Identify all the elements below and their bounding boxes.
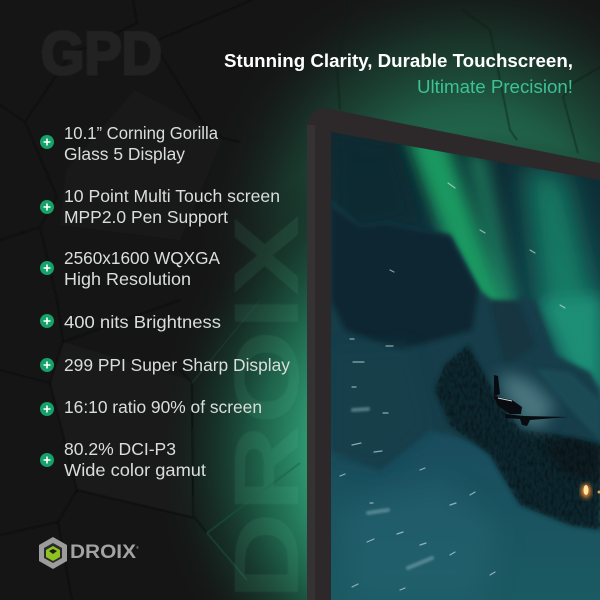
DROIX logo [39, 537, 139, 569]
feature: Multi touch [40, 186, 280, 227]
snow [340, 183, 565, 590]
feature: Gorilla Glass [40, 123, 218, 164]
feature: Multi touch: 10 Point Multi Touch screen [64, 186, 280, 206]
DROIX logo: ® [136, 545, 139, 550]
aurora [363, 144, 600, 399]
mountain [331, 200, 600, 600]
watermark: vertical DROIX logo: DROIX [216, 215, 318, 600]
watermark: GPD logo: GPD [41, 20, 162, 87]
feature: ratio: 16:10 ratio 90% of screen [64, 397, 262, 417]
subtitle: Ultimate Precision! [417, 76, 573, 97]
feature: Gorilla Glass: 10.1” Corning Gorilla [64, 123, 218, 143]
DROIX logo: DROIX [70, 542, 136, 563]
mountain rock texture [435, 345, 600, 530]
feature: resolution: 2560x1600 WQXGA [64, 248, 220, 268]
fire [581, 484, 600, 498]
feature list [40, 123, 290, 480]
feature: resolution: High Resolution [64, 269, 191, 289]
title [224, 51, 573, 97]
feature: colour gamut: Wide color gamut [64, 460, 206, 480]
feature: Gorilla Glass: Glass 5 Display [64, 144, 185, 164]
wide blurred snow streaks [353, 409, 432, 568]
laptop [307, 108, 600, 600]
feature: brightness: 400 nits Brightness [64, 312, 221, 332]
plane [493, 375, 568, 426]
feature: colour gamut [40, 439, 206, 480]
icon: hexagon cube [39, 537, 67, 569]
laptop screen image [331, 130, 600, 600]
feature: Multi touch: MPP2.0 Pen Support [64, 207, 228, 227]
feature: PPI: 299 PPI Super Sharp Display [64, 355, 290, 375]
feature: colour gamut: 80.2% DCI-P3 [64, 439, 176, 459]
laptop bezel [307, 108, 600, 600]
feature: resolution [40, 248, 220, 289]
title: Stunning Clarity, Durable Touchscreen, [224, 51, 573, 71]
